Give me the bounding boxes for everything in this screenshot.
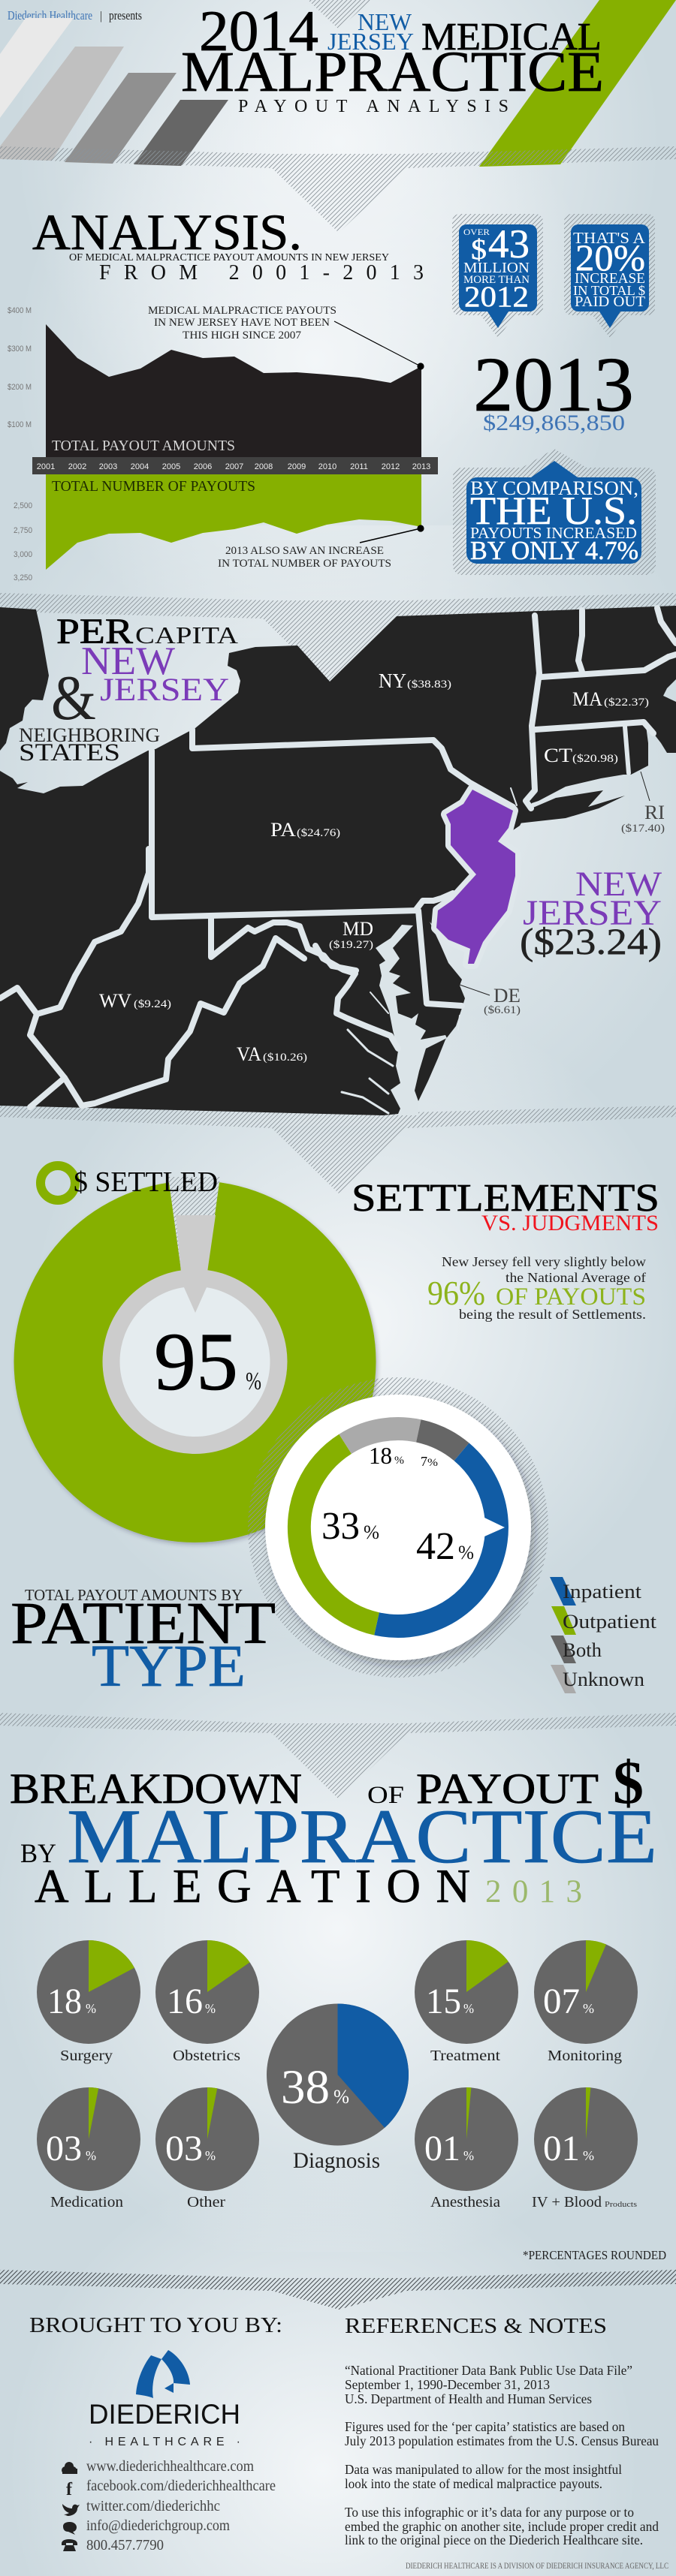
chart: total payout amounts: MEDICAL MALPRACTICE PAYOUTS: [148, 305, 336, 317]
logo: diederich healthcare: · HEALTHCARE ·: [89, 2436, 240, 2448]
heading: patient type: TOTAL PAYOUT AMOUNTS BY: [25, 1586, 243, 1604]
header tagline: presents: [109, 8, 142, 23]
text: national average: the National Average of: [505, 1270, 646, 1285]
references text: look into the state of medical malpractice payouts.: [345, 2476, 602, 2491]
chart year axis: [32, 457, 438, 474]
pie: monitoring: 07: [543, 1982, 580, 2021]
chart: total payout amounts: $100 M: [8, 420, 32, 429]
heading: breakdown by malpractice allegation: [10, 1748, 657, 1912]
pie: monitoring: [534, 1940, 638, 2064]
heading: per capita: STATES: [19, 739, 120, 766]
pie: medication: Medication: [50, 2194, 123, 2210]
callout: 20% increase: IN TOTAL $: [573, 283, 645, 298]
chart: total number of payouts: 2,750: [14, 526, 32, 535]
map state labels: ($24.76): [297, 827, 340, 839]
callout: 20% increase: 20%: [575, 236, 645, 278]
references text: U.S. Department of Health and Human Services: [345, 2391, 592, 2406]
references text: July 2013 population estimates from the U.S. Census Bureau: [345, 2433, 659, 2448]
contact list: facebook.com/diederichhealthcare: [86, 2478, 276, 2494]
pie: surgery: [37, 1940, 140, 2064]
pie: obstetrics: [155, 1940, 259, 2064]
chart: total number of payouts: 3,000: [14, 550, 32, 559]
legend: patient type: Both: [563, 1639, 602, 1661]
pie: medication: 03: [46, 2129, 82, 2168]
map state labels: DE: [493, 985, 521, 1007]
pie: anesthesia: %: [463, 2148, 474, 2163]
references text: “National Practitioner Data Bank Public Use Data File”: [345, 2363, 632, 2378]
chart: total payout amounts: [8, 305, 424, 458]
land: [0, 606, 676, 1115]
chart: total payout amounts: $200 M: [8, 383, 32, 392]
chart: total number of payouts: 2,500: [14, 501, 32, 510]
references text: link to the original piece on the Diederich Healthcare site.: [345, 2532, 643, 2547]
new jersey stat: [520, 865, 662, 962]
new jersey highlight: [436, 790, 515, 964]
heading: breakdown by malpractice allegation: OF: [367, 1782, 404, 1809]
chart year axis: 2006: [194, 462, 212, 471]
callout: 20% increase: [564, 214, 655, 338]
contact list: f: [66, 2480, 73, 2499]
state borders: [0, 608, 676, 1113]
chart year axis: 2008: [255, 462, 273, 471]
chart year axis: 2001: [37, 462, 55, 471]
chart: settled donut: [14, 1177, 376, 1542]
legend: settled: $ SETTLED: [74, 1166, 218, 1198]
references text: Data was manipulated to allow for the most insightful: [345, 2462, 622, 2477]
heading: patient type: [11, 1586, 276, 1699]
heading: breakdown by malpractice allegation: PAYOUT: [416, 1765, 599, 1813]
stat: 2013 total: 2013: [473, 342, 634, 428]
pie: monitoring: Monitoring: [548, 2048, 622, 2064]
chart: total payout amounts: TOTAL PAYOUT AMOUNTS: [52, 438, 235, 454]
title: MALPRACTICE: [181, 41, 604, 104]
contact list: [62, 2458, 276, 2553]
references text: embed the graphic on another site, include proper credit and: [345, 2519, 659, 2534]
chart: patient type donut: %: [364, 1521, 379, 1543]
legend: patient type: [550, 1577, 657, 1693]
icon: telephone: [62, 2539, 77, 2551]
pie: medication: [37, 2087, 140, 2210]
callout: U.S. comparison: THE U.S.: [470, 489, 637, 533]
pie: iv and blood products: [532, 2087, 638, 2210]
legend: patient type: Outpatient: [563, 1611, 657, 1633]
pie: iv and blood products: IV + Blood: [532, 2194, 602, 2210]
map state labels: MA: [572, 688, 602, 710]
callout: over $43 million: OVER: [463, 227, 490, 237]
chart year axis: 2011: [350, 462, 368, 471]
chart: patient type donut: %: [427, 1457, 438, 1469]
map state labels: VA: [237, 1043, 261, 1065]
pie: surgery: 18: [47, 1982, 82, 2021]
chart: settled donut: 95: [154, 1316, 238, 1407]
map state labels: CT: [544, 745, 572, 766]
heading: breakdown by malpractice allegation: $: [613, 1748, 644, 1816]
heading: breakdown by malpractice allegation: BREAKDOWN: [10, 1765, 302, 1813]
pie: treatment: [415, 1940, 518, 2064]
chart: total payout amounts: THIS HIGH SINCE 2007: [183, 330, 301, 342]
pie: diagnosis: Diagnosis: [293, 2148, 380, 2173]
callout: over $43 million: [452, 214, 543, 338]
contact list: twitter.com/diederichhc: [86, 2498, 220, 2514]
chart year axis: 2003: [99, 462, 117, 471]
callout: U.S. comparison: [453, 449, 656, 575]
callout: over $43 million: MILLION: [463, 260, 530, 276]
chart: patient type donut: %: [394, 1455, 404, 1467]
references text: Figures used for the ‘per capita’ statistics are based on: [345, 2419, 625, 2434]
legend: patient type: Unknown: [563, 1669, 644, 1690]
pie: diagnosis: 38: [281, 2060, 330, 2114]
map state labels: ($38.83): [407, 679, 451, 691]
map state labels: ($10.26): [263, 1052, 307, 1064]
chart year axis: 2012: [382, 462, 400, 471]
pie: other: %: [205, 2148, 216, 2163]
title: JERSEY: [327, 28, 414, 55]
contact list: info@diederichgroup.com: [86, 2517, 230, 2534]
section divider: allegation: [0, 1713, 676, 1799]
heading: per capita: &: [51, 663, 96, 733]
icon: speech bubbles: [63, 2522, 77, 2535]
title: PAYOUT ANALYSIS: [238, 97, 509, 116]
chesapeake bay: [376, 925, 447, 1115]
chart: settled donut: %: [246, 1368, 261, 1395]
chart: patient type donut: 7: [421, 1454, 427, 1469]
pie: diagnosis: %: [333, 2086, 349, 2108]
map state labels: PA: [270, 819, 296, 841]
callout: over $43 million: 2012: [464, 281, 529, 313]
text: national average: New Jersey fell very slightly below: [442, 1254, 646, 1269]
title: MEDICAL: [421, 16, 602, 59]
logo: diederich healthcare: [89, 2350, 240, 2448]
decorative header stripes: [0, 0, 676, 233]
heading: breakdown by malpractice allegation: 2013: [485, 1874, 582, 1909]
section divider: footer: [0, 2270, 676, 2310]
stat: 2013 total: $249,865,850: [483, 411, 625, 435]
chart year axis: 2013: [412, 462, 430, 471]
new jersey stat: JERSEY: [523, 893, 662, 933]
pie: obstetrics: %: [205, 2001, 216, 2016]
callout: U.S. comparison: BY COMPARISON,: [470, 477, 638, 499]
callout: 20% increase: INCREASE: [575, 270, 645, 287]
pie: iv and blood products: 01: [543, 2129, 580, 2168]
callout: U.S. comparison: PAYOUTS INCREASED: [470, 524, 637, 542]
contact list: www.diederichhealthcare.com: [86, 2458, 254, 2475]
section divider: map top: [0, 593, 676, 685]
map state labels: RI: [644, 802, 665, 823]
chart year axis: 2010: [318, 462, 336, 471]
pie: treatment: %: [463, 2001, 474, 2016]
map state labels: ($19.27): [329, 939, 373, 951]
references text: To use this infographic or it’s data for any purpose or to: [345, 2505, 634, 2520]
pie: medication: %: [86, 2148, 96, 2163]
pie: obstetrics: Obstetrics: [173, 2048, 240, 2064]
map state labels: [99, 670, 665, 1065]
pie: treatment: Treatment: [430, 2048, 500, 2064]
heading: breakdown by malpractice allegation: BY: [20, 1838, 56, 1868]
heading: per capita: NEW: [81, 639, 175, 683]
heading: analysis: ANALYSIS.: [32, 203, 302, 260]
heading: per capita: JERSEY: [100, 673, 229, 708]
map state labels: NY: [379, 670, 406, 692]
heading: per capita: NEIGHBORING: [19, 724, 160, 746]
heading: patient type: TYPE: [92, 1634, 246, 1699]
pie: monitoring: %: [583, 2001, 594, 2016]
pie: other: [155, 2087, 259, 2210]
map state labels: ($6.61): [484, 1004, 521, 1016]
callout: over $43 million: 43: [488, 221, 530, 266]
chart: total number of payouts: TOTAL NUMBER OF PAYOUTS: [52, 478, 255, 495]
heading: settlements vs judgments: SETTLEMENTS: [352, 1177, 659, 1220]
title: NEW: [358, 8, 412, 35]
new jersey stat: NEW: [575, 865, 662, 904]
pie: anesthesia: Anesthesia: [430, 2194, 500, 2210]
callout: over $43 million: MORE THAN: [463, 274, 530, 286]
callout: 20% increase: PAID OUT: [575, 293, 645, 310]
chart: total number of payouts: [14, 474, 424, 582]
map state labels: ($20.98): [572, 753, 618, 765]
heading: settlements vs judgments: [352, 1177, 659, 1235]
header tagline: |: [100, 10, 102, 23]
callout: 20% increase: THAT'S A: [573, 229, 646, 247]
map state labels: WV: [99, 990, 131, 1012]
title: 2014: [199, 0, 318, 63]
title: [181, 0, 604, 116]
header tagline: Diederich Healthcare: [8, 8, 92, 23]
logo: diederich healthcare: DIEDERICH: [89, 2399, 240, 2430]
heading: references and notes: REFERENCES & NOTES: [345, 2314, 607, 2338]
pie: other: Other: [187, 2194, 225, 2210]
pie: other: 03: [165, 2129, 203, 2168]
callout: U.S. comparison: BY ONLY 4.7%: [470, 536, 638, 565]
chart year axis: 2007: [225, 462, 243, 471]
chart: total payout amounts: IN NEW JERSEY HAVE NOT BEEN: [154, 317, 330, 329]
heading: settlements vs judgments: VS. JUDGMENTS: [481, 1211, 659, 1235]
map state labels: ($17.40): [621, 823, 665, 835]
text: national average: OF PAYOUTS: [496, 1283, 646, 1311]
leader lines: [460, 772, 650, 995]
heading: breakdown by malpractice allegation: ALLEGATION: [35, 1860, 470, 1912]
chart: total payout amounts: $300 M: [8, 345, 32, 354]
callout: over $43 million: $: [471, 234, 487, 266]
chart year axis: 2009: [288, 462, 306, 471]
heading: per capita: PER: [56, 612, 133, 652]
pie: treatment: 15: [426, 1982, 461, 2021]
map: New Jersey and neighboring states: [0, 606, 676, 1115]
heading: per capita: CAPITA: [135, 621, 238, 649]
chart year axis: 2005: [162, 462, 180, 471]
text: national average: [427, 1254, 646, 1322]
new jersey stat: ($23.24): [520, 920, 662, 962]
chart year axis: 2004: [131, 462, 149, 471]
references text: September 1, 1990-December 31, 2013: [345, 2377, 550, 2392]
text: national average: being the result of Settlements.: [459, 1307, 646, 1322]
pie: surgery: Surgery: [60, 2048, 113, 2064]
chart: total number of payouts: IN TOTAL NUMBER OF PAYOUTS: [218, 558, 391, 570]
chart: patient type donut: 42: [416, 1525, 455, 1568]
heading: analysis: [32, 203, 424, 284]
map state labels: MD: [343, 918, 373, 940]
chart: patient type donut: %: [458, 1542, 474, 1563]
contact list: 800.457.7790: [86, 2537, 164, 2553]
pie: iv and blood products: Products: [605, 2201, 637, 2209]
map state labels: ($9.24): [134, 998, 171, 1010]
chart: patient type donut: 18: [369, 1442, 392, 1469]
chart: patient type donut: 33: [321, 1505, 360, 1548]
icon: cloud web: [62, 2462, 77, 2474]
heading: analysis: OF MEDICAL MALPRACTICE PAYOUT AMOUNTS IN NEW JERSEY: [69, 251, 389, 263]
long island: [518, 790, 625, 823]
text: national average: 96%: [427, 1274, 485, 1312]
pie: iv and blood products: %: [583, 2148, 594, 2163]
map state labels: ($22.37): [604, 697, 649, 709]
heading: analysis: FROM 2001-2013: [99, 261, 424, 284]
heading: breakdown by malpractice allegation: MALPRACTICE: [67, 1794, 657, 1879]
chart: total payout amounts: $400 M: [8, 306, 32, 315]
heading: patient type: PATIENT: [11, 1591, 276, 1657]
heading: brought to you by: BROUGHT TO YOU BY:: [29, 2313, 282, 2337]
chart: total number of payouts: 3,250: [14, 573, 32, 582]
references text: [345, 2363, 659, 2547]
chart year axis: 2002: [68, 462, 86, 471]
icon: twitter bird: [62, 2504, 80, 2516]
pie: surgery: %: [86, 2001, 96, 2016]
pie: obstetrics: 16: [167, 1982, 203, 2021]
chart: patient type donut: [248, 1377, 548, 1678]
section divider: map bottom: [0, 1103, 676, 1193]
pie: anesthesia: 01: [424, 2129, 460, 2168]
chart: total number of payouts: 2013 ALSO SAW AN INCREASE: [225, 545, 384, 557]
pie: anesthesia: [415, 2087, 518, 2210]
heading: per capita: [19, 612, 238, 766]
pie: diagnosis: [267, 2004, 409, 2173]
legend: patient type: Inpatient: [563, 1581, 642, 1602]
